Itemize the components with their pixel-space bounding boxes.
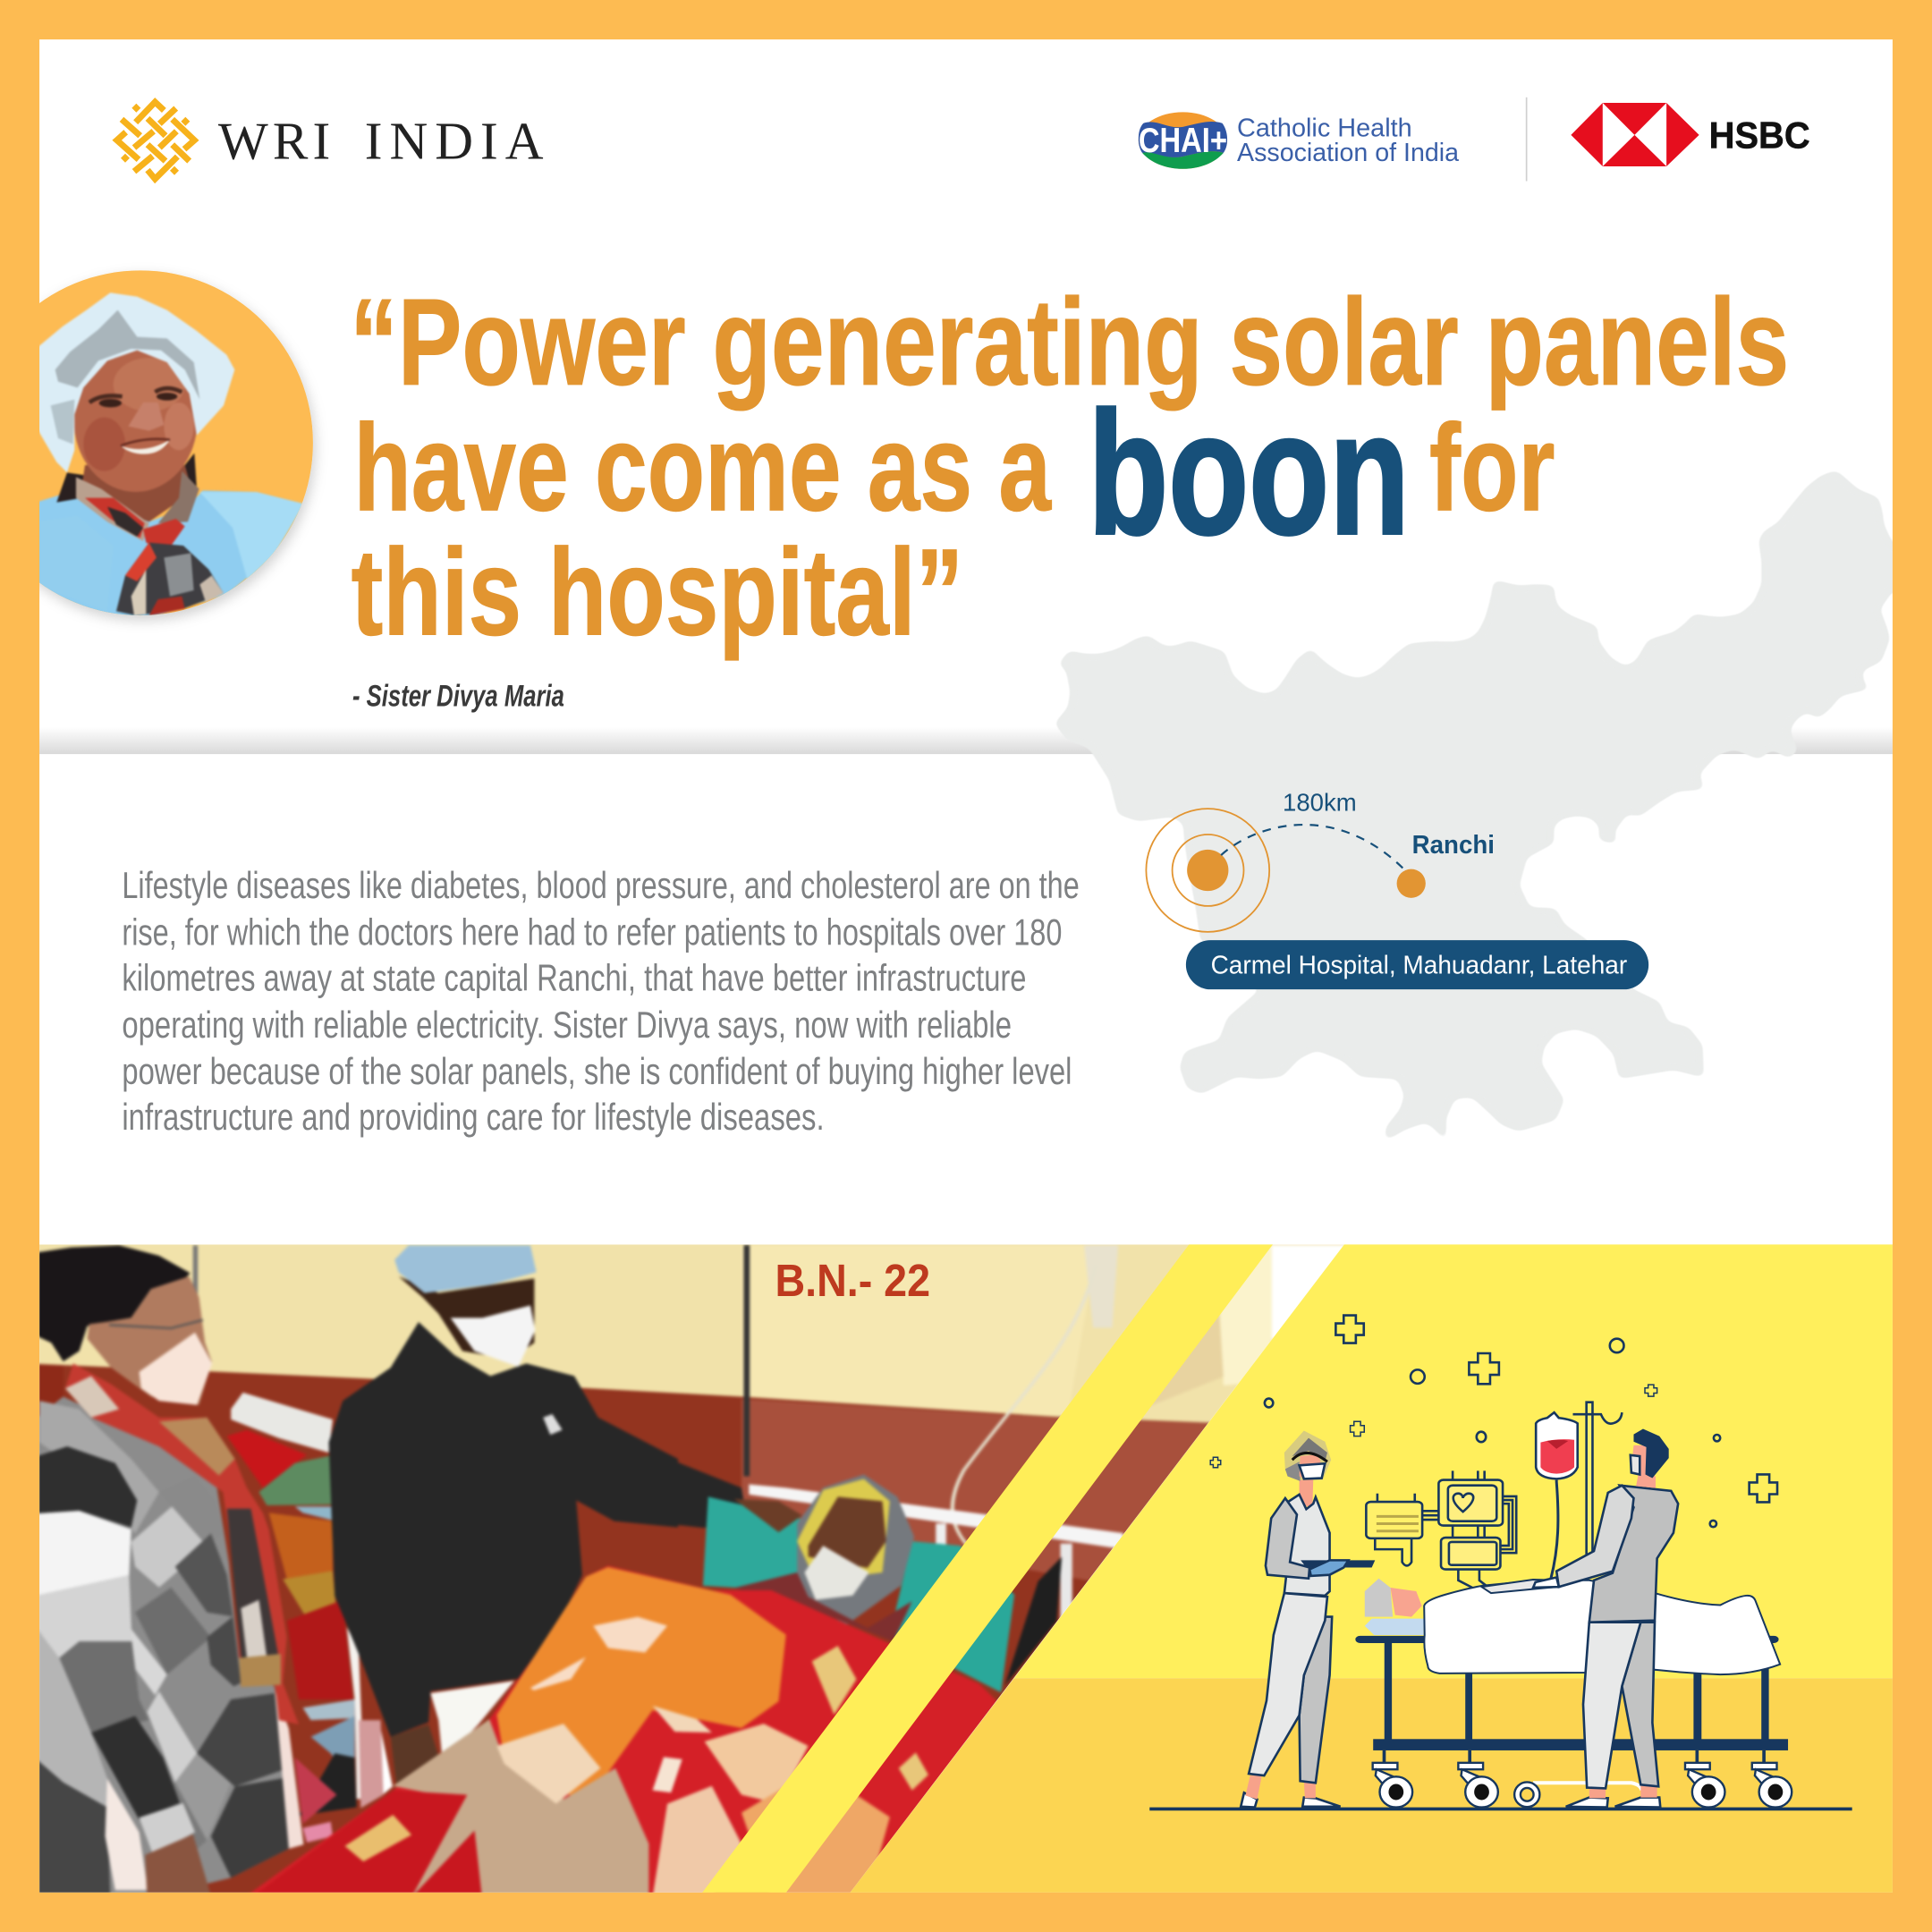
nurse figure	[1241, 1431, 1375, 1808]
pillow	[703, 1496, 804, 1588]
panel: illustration background	[851, 1244, 1893, 1893]
logo: HSBC	[1571, 103, 1810, 166]
city label: Ranchi	[1412, 830, 1495, 859]
man in black jacket	[329, 1245, 678, 1786]
patient monitors	[1366, 1470, 1516, 1588]
patient in bed	[1365, 1579, 1780, 1674]
icon: CHAI emblem	[1139, 112, 1227, 169]
title: quote	[350, 274, 1789, 661]
icon: CHAI emblem: CHAI+	[1139, 122, 1227, 160]
location pill	[1186, 940, 1648, 989]
title: quote: for	[1429, 399, 1555, 537]
marker: Ranchi dot	[1397, 869, 1426, 898]
distance label: 180km	[1283, 788, 1357, 816]
shelf items	[39, 1245, 393, 1843]
body paragraph: infrastructure and providing care for lifestyle diseases.	[122, 1097, 825, 1138]
title: quote: this hospital”	[352, 523, 963, 661]
body paragraph: Lifestyle diseases like diabetes, blood pressure, and cholesterol are on the	[122, 865, 1080, 906]
text: organisation name: Association of India	[1237, 138, 1459, 166]
woman, man and shelf	[15, 1245, 678, 1899]
map annotations	[1146, 788, 1648, 989]
portrait figure	[36, 292, 304, 617]
text: organisation name	[1237, 113, 1459, 166]
bed number sign: B.N.- 22	[775, 1255, 930, 1306]
hospital bed frame	[1149, 1636, 1852, 1810]
wordmark	[218, 112, 544, 171]
body paragraph	[122, 865, 1080, 1138]
title: quote: have come as a	[353, 399, 1052, 537]
patient	[734, 1475, 914, 1641]
woman with scarf	[15, 1245, 303, 1899]
blanket	[245, 1565, 997, 1897]
body paragraph: operating with reliable electricity. Sister Divya says, now with reliable	[122, 1004, 1012, 1046]
wordmark: HSBC	[1709, 114, 1810, 156]
location pill: Carmel Hospital, Mahuadanr, Latehar	[1211, 950, 1627, 979]
wordmark: INDIA	[365, 112, 544, 171]
diagonal yellow band	[702, 1244, 1273, 1893]
map: Jharkhand state silhouette	[1055, 470, 1904, 1143]
illustration: medical team at a hospital bed	[1149, 1316, 1852, 1810]
bed rail	[749, 1484, 1123, 1549]
bed wheels	[1373, 1763, 1792, 1808]
wordmark: WRI	[218, 112, 330, 171]
decorative medical crosses	[1210, 1316, 1777, 1502]
patient, pillow and blanket	[245, 1448, 1062, 1897]
icon: WRI knot	[117, 102, 194, 179]
decorative circles	[1265, 1339, 1720, 1527]
marker: Carmel Hospital target rings	[1146, 809, 1269, 932]
IV pole and blood bag	[1536, 1402, 1622, 1579]
text: organisation name: Catholic Health	[1237, 113, 1412, 141]
logo divider	[1526, 97, 1527, 181]
ward wall	[22, 1239, 1394, 1897]
logo: WRI India	[117, 102, 544, 179]
body paragraph: kilometres away at state capital Ranchi, that have better infrastructure	[122, 958, 1027, 999]
icon: HSBC hexagon	[1571, 103, 1699, 166]
portrait: Sister Divya Maria	[0, 270, 313, 617]
body paragraph: rise, for which the doctors here had to refer patients to hospitals over 180	[122, 912, 1062, 953]
logo: Catholic Health Association of India	[1139, 112, 1459, 169]
dashed route arc	[1221, 825, 1406, 871]
emphasised word: boon: boon	[1088, 376, 1410, 571]
portrait backing circle	[0, 270, 313, 615]
body paragraph: power because of the solar panels, she is confident of buying higher level	[122, 1051, 1072, 1092]
attribution: - Sister Divya Maria	[352, 679, 564, 713]
doctor figure	[1533, 1428, 1678, 1808]
section divider shadow	[39, 727, 1893, 754]
photo: hospital ward	[15, 1239, 1394, 1899]
